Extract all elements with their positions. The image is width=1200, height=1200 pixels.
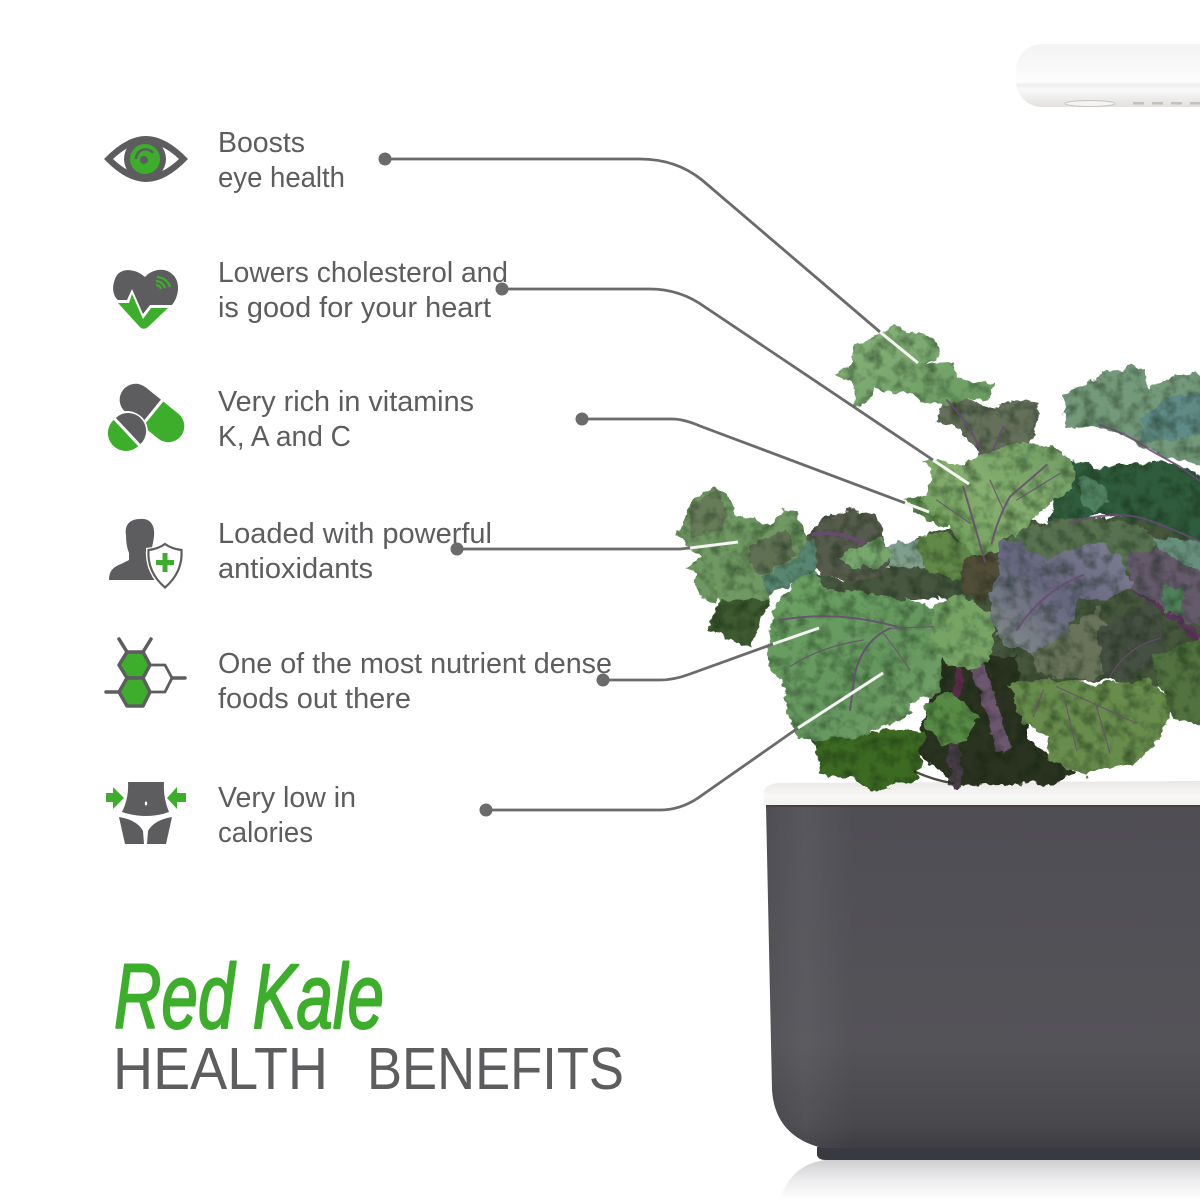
body highlight: [766, 806, 1200, 1148]
heading: health benefits: HEALTH: [113, 1036, 328, 1102]
text: heart: [218, 257, 508, 324]
text: low calories: calories: [218, 817, 313, 849]
leaf: purple big: [990, 542, 1132, 652]
planter: [764, 781, 1200, 1200]
text: nutrient dense: foods out there: [218, 683, 411, 715]
leaf: teal fold: [760, 537, 818, 592]
leaf: center main: [922, 442, 1078, 567]
planter body: [766, 806, 1200, 1148]
heading: health benefits: BENEFITS: [367, 1036, 624, 1102]
leaf: back olive: [1003, 517, 1160, 570]
text: vitamins: Very rich in vitamins: [218, 386, 474, 418]
leaf: bottom dark: [812, 728, 925, 792]
leaf: top right: [1062, 365, 1200, 467]
text: eye health: Boosts: [218, 127, 305, 159]
leaf: frill tip left of center: [903, 495, 957, 527]
leaf: upper brown: [937, 398, 1038, 458]
leader 4: [450, 542, 738, 556]
leader 6: [480, 673, 883, 816]
leaf: small lower: [925, 692, 978, 745]
leader 1: [378, 152, 918, 363]
kale plant: [677, 325, 1200, 792]
text: eye health: [218, 127, 345, 194]
leaf: dark right: [1045, 458, 1200, 545]
icon: pills: [97, 377, 191, 462]
leaf: far left: [677, 487, 818, 648]
text: heart: Lowers cholesterol and: [218, 257, 508, 289]
icon: eye: [104, 136, 188, 182]
leaf: right green: [1152, 635, 1200, 728]
text: low calories: Very low in: [218, 782, 356, 814]
veins: [780, 400, 1200, 783]
leaf: dark purple olive: [1098, 602, 1168, 678]
icon: person with shield: [109, 519, 184, 591]
text: low calories: [218, 782, 356, 849]
leaf: top light: [835, 325, 995, 408]
text: eye health: eye health: [218, 162, 345, 194]
dark interior: [917, 657, 1077, 785]
text: antioxidants: [218, 518, 492, 585]
leaf: blue green right: [1153, 537, 1200, 583]
leaf: bottom right big: [1008, 678, 1172, 775]
icon: waist: [106, 782, 186, 844]
leader 2: [496, 282, 969, 484]
text: vitamins: K, A and C: [218, 421, 351, 453]
leader 5: [596, 628, 819, 686]
leaf: olive mid: [1032, 608, 1112, 682]
leaf: right of big: [928, 595, 995, 670]
leaf: purple right: [1128, 548, 1200, 632]
text: nutrient dense: One of the most nutrient dense: [218, 648, 612, 680]
leaf: left center brown: [808, 508, 892, 582]
icon: heart: [113, 270, 178, 329]
lamp head: [1016, 44, 1200, 107]
text: antioxidants: antioxidants: [218, 553, 373, 585]
back stems: [953, 590, 1200, 783]
title: Red Kale: Red Kale: [114, 946, 384, 1048]
reflection: [780, 1160, 1200, 1200]
leaf: under center: [917, 532, 985, 588]
text: heart: is good for your heart: [218, 292, 491, 324]
heading: health benefits: [113, 1036, 624, 1102]
leader 3: [576, 412, 929, 512]
band behind: [813, 568, 940, 602]
dense filler: [883, 517, 1200, 720]
planter foot: [817, 1147, 1200, 1160]
planter lid: [764, 781, 1200, 806]
text: antioxidants: Loaded with powerful: [218, 518, 492, 550]
leaf: big lower left: [765, 572, 942, 745]
icon: molecule: [106, 639, 185, 706]
text: vitamins: [218, 386, 474, 453]
text: nutrient dense: [218, 648, 612, 715]
